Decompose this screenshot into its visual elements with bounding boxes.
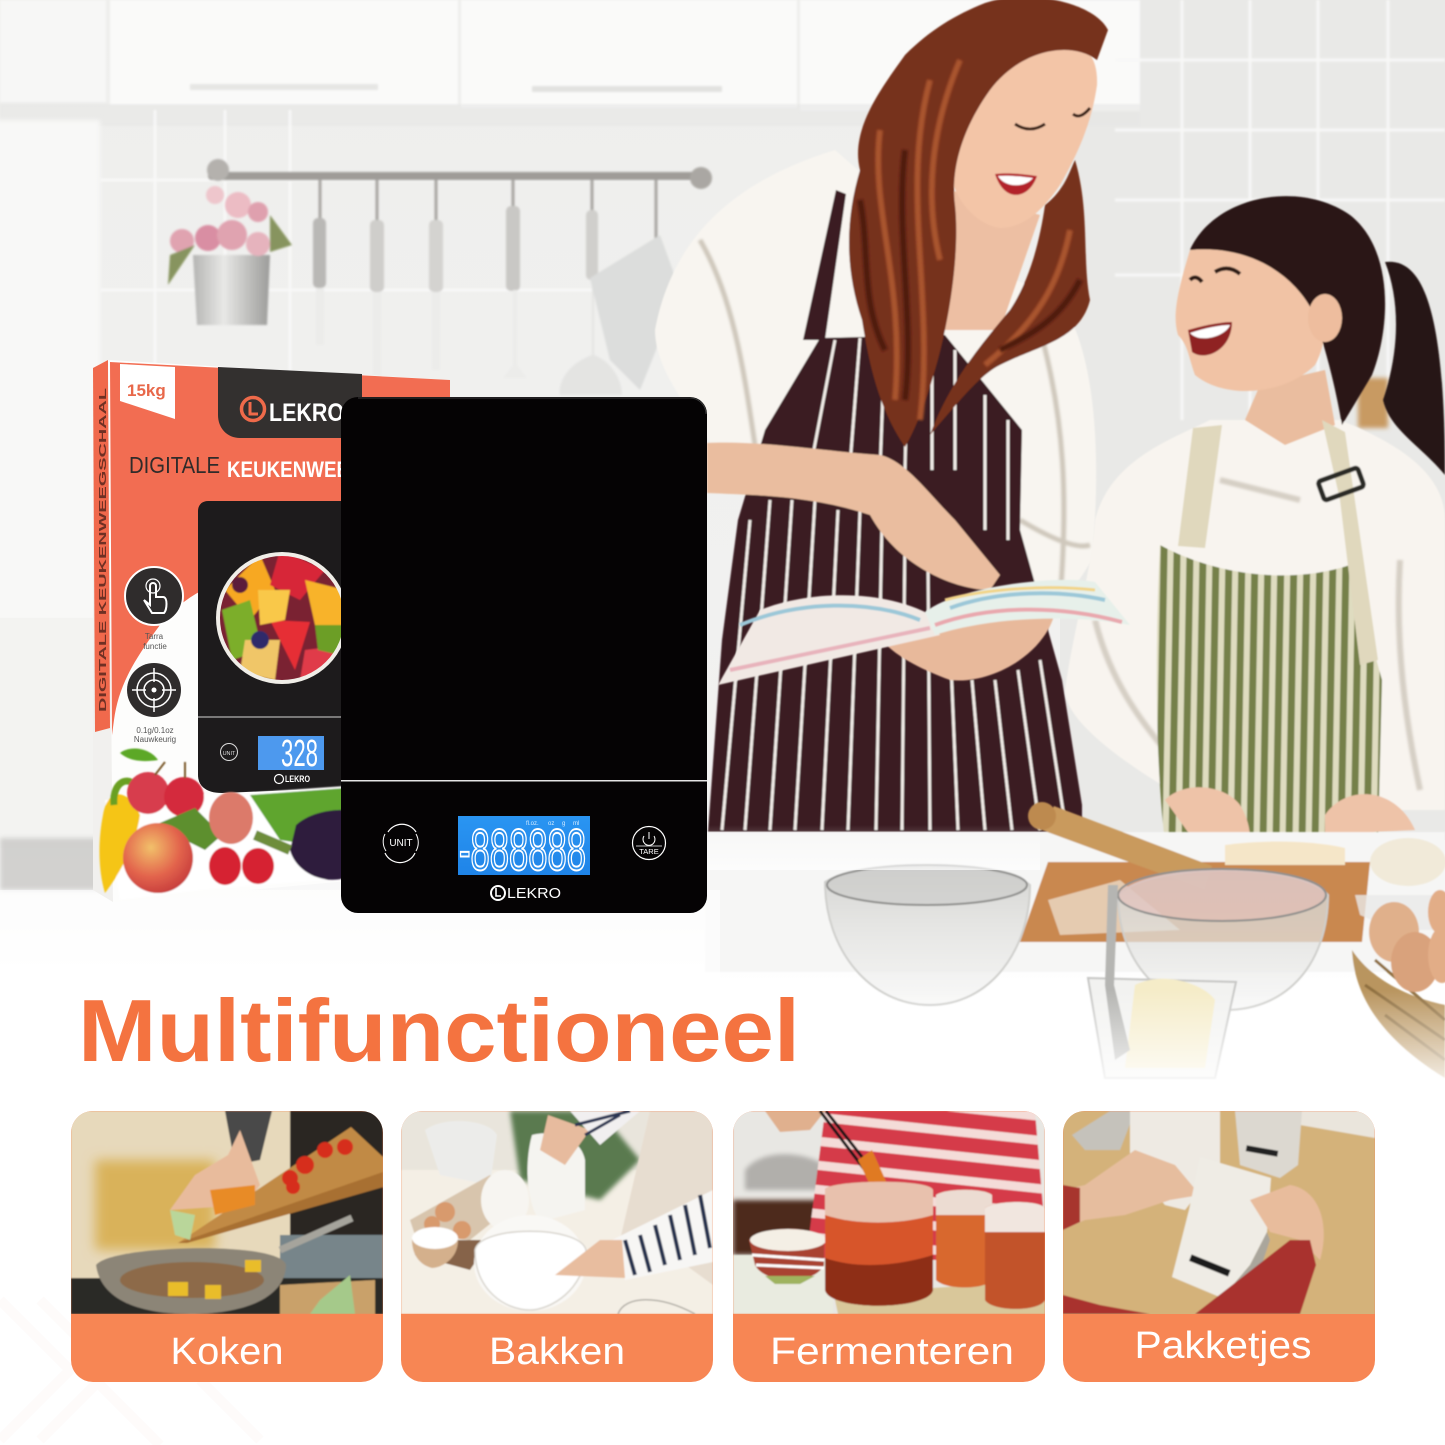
card: Koken	[71, 1111, 383, 1382]
girl hands	[1165, 787, 1415, 868]
table surface with baking items	[705, 802, 1445, 1078]
smile	[995, 173, 1037, 195]
lcd display: -888888	[459, 818, 586, 883]
small logo: LEKRO	[285, 774, 310, 784]
lcd display: oz	[548, 821, 554, 827]
woman with apron	[655, 0, 1108, 832]
apron strap	[803, 190, 846, 340]
lcd display: fl.oz.	[526, 821, 539, 827]
label: Koken	[170, 1331, 284, 1373]
small logo	[274, 774, 310, 784]
tarra label: functie	[143, 642, 167, 651]
ear	[1308, 294, 1342, 342]
wall tiles	[100, 0, 1445, 420]
photo: baking	[401, 1111, 713, 1314]
neck	[935, 190, 1040, 330]
rolling pin	[1028, 802, 1212, 890]
accuracy label: 0.1g/0.1oz	[136, 726, 174, 735]
open mouth	[1188, 322, 1232, 355]
right glass bowl	[1118, 870, 1328, 1010]
accuracy label	[134, 726, 176, 744]
card: Pakketjes	[1063, 1111, 1375, 1382]
icon: accuracy target	[127, 663, 181, 717]
hair	[849, 0, 1108, 447]
wooden board	[1020, 862, 1370, 942]
dough roll	[1225, 842, 1345, 865]
green apron	[1157, 545, 1382, 842]
unit button: UNIT	[389, 838, 413, 849]
box spine	[93, 360, 113, 902]
photo: packing pouches	[1063, 1111, 1375, 1315]
recipe book with holding hand	[718, 580, 1130, 685]
scale on box	[198, 501, 350, 793]
spine text: DIGITALE KEUKENWEEGSCHAAL	[98, 388, 109, 712]
girl with green apron	[1065, 196, 1445, 868]
flower pot	[168, 186, 292, 325]
small display	[258, 733, 324, 775]
white fades over photo	[0, 825, 1445, 1445]
lower counter left	[0, 618, 95, 848]
shelf item behind girl	[1358, 378, 1388, 428]
face	[1176, 231, 1325, 391]
product box	[93, 360, 450, 902]
egg basket	[1352, 890, 1445, 1078]
accuracy label: Nauwkeurig	[134, 735, 176, 744]
butter dish	[1088, 885, 1236, 1078]
digital kitchen scale	[341, 397, 707, 913]
hair	[1190, 196, 1385, 425]
label: Bakken	[489, 1331, 625, 1373]
unit button small: UNIT	[223, 751, 236, 757]
apron straps	[1178, 420, 1378, 665]
tarra label: Tarra	[145, 632, 164, 641]
title: Multifunctioneel	[78, 981, 800, 1080]
tarra label	[143, 632, 167, 651]
face	[950, 45, 1097, 228]
ponytail	[1383, 262, 1445, 475]
shirt	[655, 150, 1096, 610]
box heading	[129, 452, 349, 482]
card: Bakken	[401, 1111, 713, 1382]
lower hand	[870, 611, 1055, 681]
box heading: KEUKENWEE	[227, 457, 349, 482]
logo banner on box	[218, 367, 362, 438]
lekro logo: LEKRO	[507, 885, 561, 902]
shirt	[1065, 420, 1445, 810]
tare button	[632, 826, 666, 860]
eyes	[1015, 108, 1090, 129]
logo banner on box: LEKRO	[269, 399, 344, 427]
left glass bowl	[825, 866, 1030, 1005]
apron	[708, 335, 1082, 832]
divider line	[341, 780, 707, 782]
icon: tare touch	[125, 567, 183, 625]
fruit bowl	[216, 552, 341, 684]
coral front panel	[110, 362, 450, 735]
lcd display	[458, 816, 590, 883]
lcd display: ml	[573, 821, 579, 827]
utensil rail	[207, 159, 712, 395]
photo: kimchi jars	[733, 1111, 1045, 1314]
lcd display: g	[562, 821, 565, 827]
box heading: DIGITALE	[129, 452, 220, 478]
card: Fermenteren	[733, 1111, 1045, 1382]
upper kitchen cabinets	[0, 0, 1140, 126]
left window wash	[0, 120, 100, 620]
photo: cooking	[71, 1111, 383, 1314]
box front	[108, 360, 450, 902]
unit button	[383, 824, 418, 863]
tare button: TARE	[639, 847, 659, 856]
vegetables	[99, 749, 345, 900]
label: Pakketjes	[1134, 1325, 1312, 1367]
forearm and pointing hand	[707, 443, 1000, 590]
15kg tag: 15kg	[127, 381, 166, 400]
small display: 328	[281, 733, 318, 775]
label: Fermenteren	[770, 1331, 1014, 1373]
neck	[1245, 370, 1335, 445]
flour dough pieces	[1370, 838, 1445, 886]
15kg tag	[120, 364, 175, 419]
unit button small	[220, 744, 238, 760]
